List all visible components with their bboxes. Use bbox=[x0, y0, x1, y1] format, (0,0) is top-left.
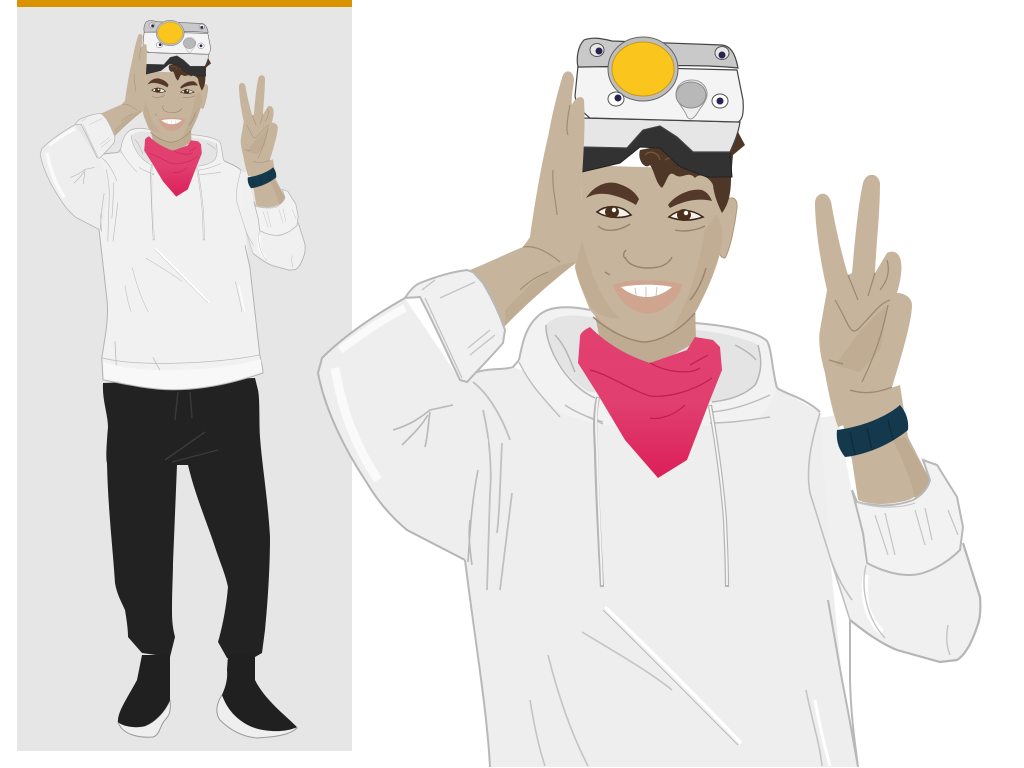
bandana bbox=[578, 327, 722, 478]
upper body shared drawing bbox=[318, 37, 963, 587]
yellow lens bbox=[608, 37, 678, 101]
neck bbox=[592, 300, 696, 368]
head bbox=[575, 165, 737, 342]
grey button bbox=[676, 80, 707, 119]
mouth bbox=[613, 280, 682, 314]
peace hand and forearm bbox=[815, 175, 930, 504]
nose and cheek lines bbox=[598, 224, 706, 300]
raised arm and hand bbox=[470, 71, 585, 345]
hoodie torso bbox=[465, 360, 858, 767]
face shading bbox=[575, 215, 722, 330]
face bbox=[575, 165, 730, 342]
hair bbox=[639, 132, 745, 213]
headset bbox=[575, 37, 743, 177]
panel: grey background bbox=[17, 7, 352, 751]
orange top bar bbox=[17, 0, 352, 7]
upper shell bbox=[575, 66, 743, 122]
camera dots bbox=[590, 44, 729, 108]
left sleeve bbox=[318, 298, 488, 565]
small figure: right shoe bbox=[217, 655, 297, 738]
top plate bbox=[577, 38, 738, 68]
small figure: left shoe bbox=[118, 655, 170, 737]
eyebrows bbox=[586, 183, 712, 208]
hood bbox=[519, 307, 777, 425]
large figure: portrait bbox=[318, 37, 980, 767]
head strap bbox=[582, 126, 732, 177]
hoodie wrinkles bbox=[473, 382, 852, 766]
wristband bbox=[837, 405, 908, 457]
lower shell bbox=[582, 118, 740, 152]
small figure: upper body bbox=[40, 20, 305, 390]
right cuff bbox=[852, 460, 963, 575]
ear bbox=[717, 198, 737, 258]
eyes bbox=[597, 206, 703, 221]
small figure: trousers bbox=[103, 378, 270, 658]
left cuff bbox=[405, 270, 505, 382]
small figure: hoodie torso and hem bbox=[99, 149, 263, 390]
right sleeve bbox=[810, 415, 980, 662]
drawstrings bbox=[595, 397, 727, 587]
